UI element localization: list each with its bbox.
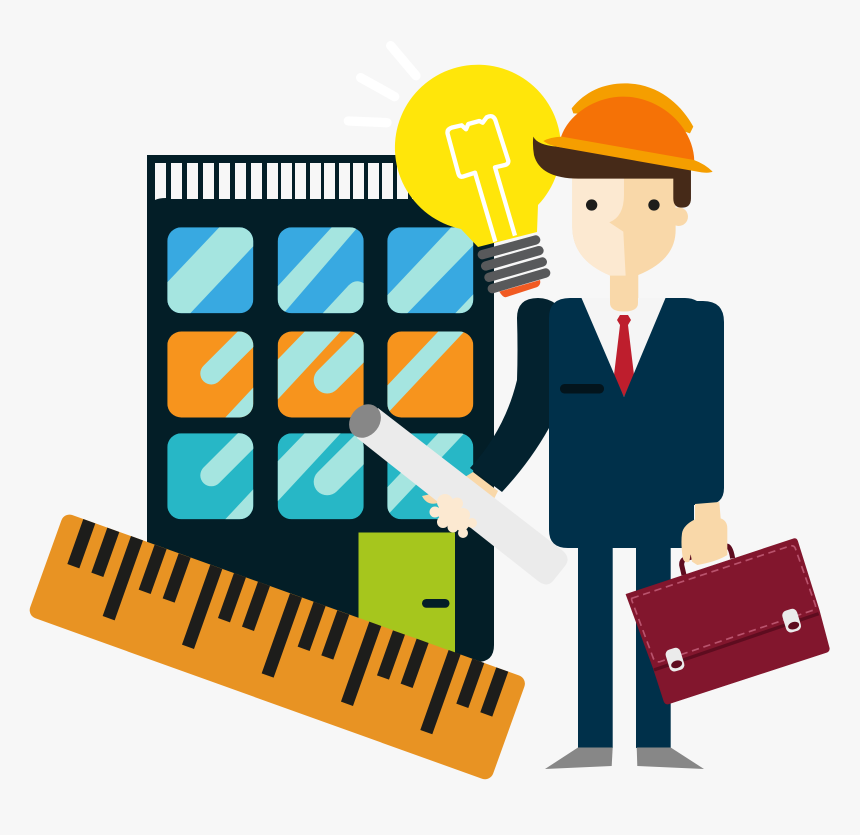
ruler ticks [67,519,508,734]
door handle [422,599,450,608]
hand holding roll [430,494,477,538]
trousers [578,540,671,748]
window row 1 col 3 [387,227,473,313]
wrist [460,472,498,503]
briefcase body [626,539,829,704]
filament [447,116,515,242]
building body [147,155,494,662]
icon: light rays [348,46,416,123]
window row 3 col 1 [167,433,254,520]
bulb tip [499,280,540,297]
face [572,177,676,275]
right eye [648,199,660,211]
window row 3 col 3 [387,433,473,519]
door [358,532,455,658]
hard hat dome [561,97,694,162]
briefcase flap line [654,614,819,670]
blueprint roll [342,398,568,584]
tie [614,315,634,397]
neck over collar [610,290,638,312]
ruler [27,512,527,782]
window row 2 col 1 [167,332,254,418]
shoes [545,748,704,769]
roof railing slats [155,163,423,200]
left clasp [664,647,686,673]
window row 3 col 2 [278,433,364,520]
window row 1 col 2 [278,227,364,313]
illustration [30,64,830,780]
man's raised arm [470,298,556,492]
ear [669,207,688,226]
shirt [581,298,666,397]
screw base [482,240,546,297]
man's head and hard hat [533,83,713,311]
hard hat brim [543,137,713,173]
left eye [586,199,597,211]
neck [610,272,638,311]
roll body [357,408,568,584]
bulb glass [395,65,561,247]
screw threads [482,240,546,289]
window row 2 col 3 [387,332,473,418]
jacket pocket [560,384,604,394]
hard hat back [572,83,693,133]
roll end [342,398,388,444]
ruler body [27,512,527,782]
right clasp [781,608,802,634]
briefcase and hand [626,502,829,704]
thumb [422,492,440,504]
light bulb [395,65,561,297]
hair [533,137,691,208]
suit jacket [549,298,724,548]
building [147,155,494,662]
briefcase handle [682,546,733,575]
face highlight [572,177,626,276]
briefcase stitching [632,546,816,662]
window row 1 col 1 [167,227,253,313]
hand holding briefcase [681,502,727,565]
window row 2 col 2 [278,332,364,418]
